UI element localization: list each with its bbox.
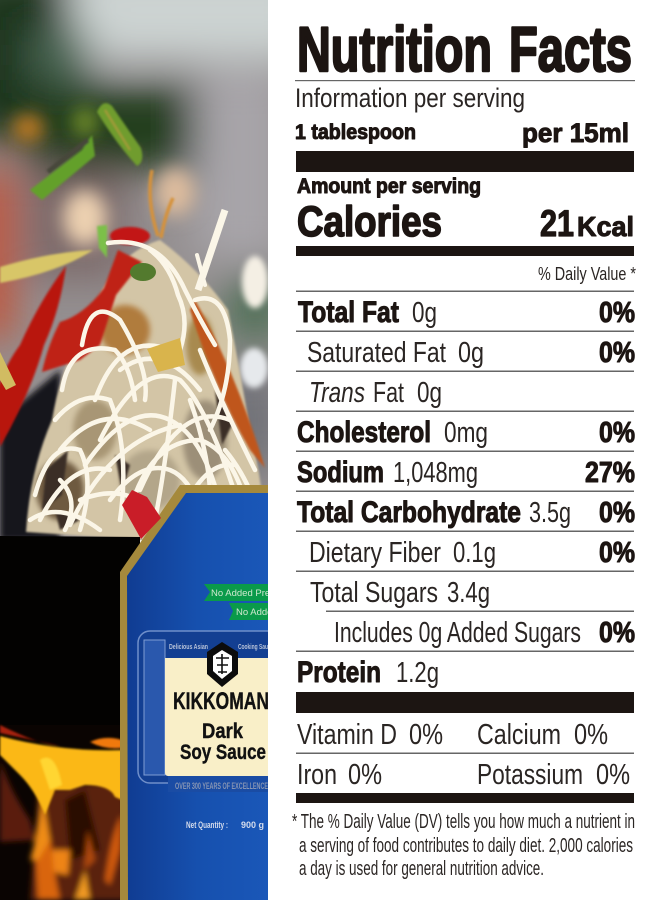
calories: Calories: [297, 198, 442, 246]
red chilies: [0, 227, 265, 468]
nutrient rows: 0%: [599, 537, 635, 569]
red pouch cap: [122, 490, 161, 539]
serving info: [295, 83, 629, 148]
net quantity: 900 g: [241, 820, 264, 830]
vitamins and minerals: Calcium: [477, 719, 561, 751]
footnote: a day is used for general nutrition advice.: [299, 858, 544, 880]
nutrient rows: 0%: [599, 497, 635, 529]
soy sauce pouch: Delicious Asian: [169, 644, 208, 651]
calories: Amount per serving: [297, 175, 481, 198]
serving info: per 15ml: [522, 118, 629, 148]
nutrient rows: 27%: [585, 457, 635, 489]
product name: Dark: [202, 720, 243, 743]
nutrient rows: Dietary Fiber: [309, 537, 441, 569]
pouch body: [120, 485, 268, 900]
daily value heading: % Daily Value *: [538, 264, 636, 284]
title: Nutrition: [297, 15, 492, 85]
flames: [0, 725, 125, 900]
blurred kitchen background: [0, 0, 268, 540]
nutrient rows: Protein: [297, 656, 381, 689]
vitamins and minerals: 0%: [348, 759, 382, 791]
excellence strip: [168, 776, 268, 792]
nutrient rows: 3.5g: [529, 497, 571, 529]
calories: Kcal: [577, 211, 634, 242]
kikkoman hexagon logo: [207, 642, 238, 687]
calories: 21: [540, 203, 574, 244]
nutrient rows: Fat: [373, 377, 404, 409]
serving info: 1 tablespoon: [295, 121, 416, 144]
nutrient rows: 0%: [599, 297, 635, 329]
noodle pile: [0, 210, 266, 540]
nutrient rows: 0g: [458, 337, 484, 369]
nutrient rows: 3.4g: [447, 577, 490, 609]
flying green beans: [0, 103, 173, 283]
dark gaps between noodles: [42, 390, 232, 530]
net quantity: Net Quantity :: [186, 820, 228, 830]
nutrient rows: Cholesterol: [297, 416, 431, 449]
nutrient rows: 0g: [417, 377, 442, 409]
footnote: [292, 811, 635, 880]
vitamins and minerals: Iron: [297, 759, 337, 791]
nutrient rows: 0.1g: [453, 537, 496, 569]
nutrient rows: 0%: [599, 337, 635, 369]
nutrient rows: Saturated Fat: [307, 337, 446, 369]
calories: [297, 175, 634, 246]
product name: [173, 688, 269, 764]
net quantity: [186, 822, 264, 830]
nutrient rows: Sodium: [297, 456, 384, 489]
nutrient rows: 0g: [412, 297, 437, 329]
food tones among noodles: [36, 305, 227, 520]
nutrient rows: [297, 296, 635, 689]
vitamins and minerals: 0%: [574, 719, 608, 751]
vitamins and minerals: 0%: [409, 719, 443, 751]
nutrient rows: Total Carbohydrate: [297, 496, 521, 529]
nutrient rows: Total Fat: [298, 296, 399, 329]
nutrient rows: 0mg: [444, 417, 488, 449]
nutrient rows: 1.2g: [396, 657, 439, 689]
vitamins and minerals: [297, 719, 630, 791]
label frame: [137, 630, 268, 784]
serving info: Information per serving: [295, 83, 525, 113]
nutrient rows: 1,048mg: [393, 457, 478, 489]
nutrient rows: 0%: [599, 617, 635, 649]
nutrient rows: Trans: [309, 377, 365, 409]
panel: food photo with wok and soy sauce pouch: [0, 0, 268, 900]
vitamins and minerals: Vitamin D: [297, 719, 397, 751]
vitamins and minerals: Potassium: [477, 759, 583, 791]
green labels: [204, 584, 268, 620]
nutrient rows: Total Sugars: [310, 577, 438, 609]
soy sauce pouch: [120, 485, 268, 900]
black wok: [0, 536, 140, 745]
vitamins and minerals: 0%: [596, 759, 630, 791]
nutrient rows: 0%: [599, 417, 635, 449]
